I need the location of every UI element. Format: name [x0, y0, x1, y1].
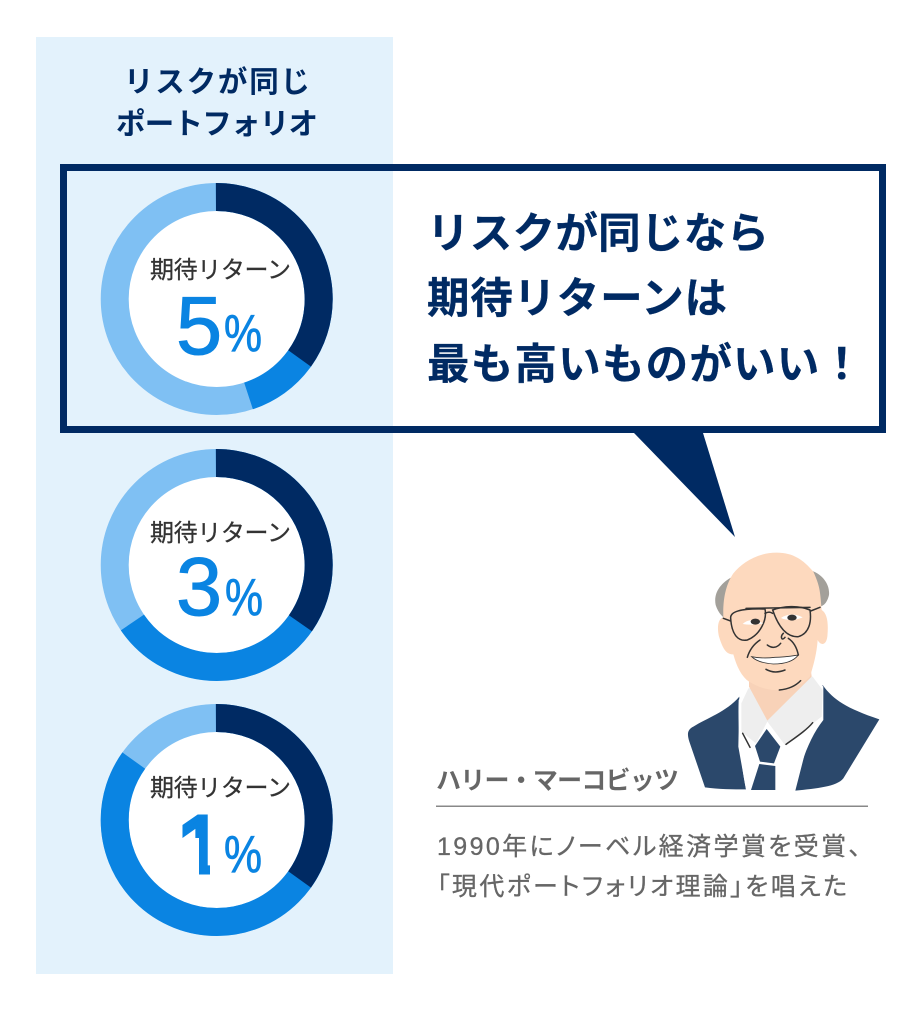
heading: same-risk portfolios: ポートフォリオ [116, 108, 318, 141]
biography text [437, 833, 861, 901]
donut chart: 3% return: 期待リターン [150, 520, 291, 547]
donut chart: 1% return: 1 [177, 799, 223, 892]
donut chart: 5% return [101, 183, 333, 415]
heading: same-risk portfolios [116, 65, 318, 141]
donut chart: 1% return: % [224, 826, 262, 884]
panel: risk-equal portfolios background [36, 37, 393, 974]
divider under name [436, 806, 868, 807]
donut chart: 5% return: 5 [176, 279, 222, 372]
icon: portrait of Harry Markowitz [688, 553, 879, 791]
callout text [427, 211, 863, 389]
callout text: 期待リターンは [427, 276, 727, 323]
donut chart: 5% return: 期待リターン [150, 257, 291, 284]
callout text: 最も高いものがいい！ [427, 342, 863, 389]
donut chart: 3% return [101, 449, 333, 681]
donut chart: 1% return: 期待リターン [150, 775, 291, 802]
heading: same-risk portfolios: リスクが同じ [124, 65, 310, 99]
donut chart: 3% return: % [225, 569, 263, 627]
donut chart: 3% return: 3 [176, 540, 222, 633]
person name: ハリー・マーコビッツ [436, 767, 679, 795]
callout box [64, 167, 883, 430]
callout tail [634, 433, 735, 537]
callout text: リスクが同じなら [427, 211, 769, 258]
biography text: 「現代ポートフォリオ理論」を唱えた [437, 873, 847, 901]
donut chart: 5% return: % [224, 305, 262, 363]
donut chart: 1% return [101, 704, 333, 936]
biography text: 1990年にノーベル経済学賞を受賞、 [437, 833, 861, 861]
